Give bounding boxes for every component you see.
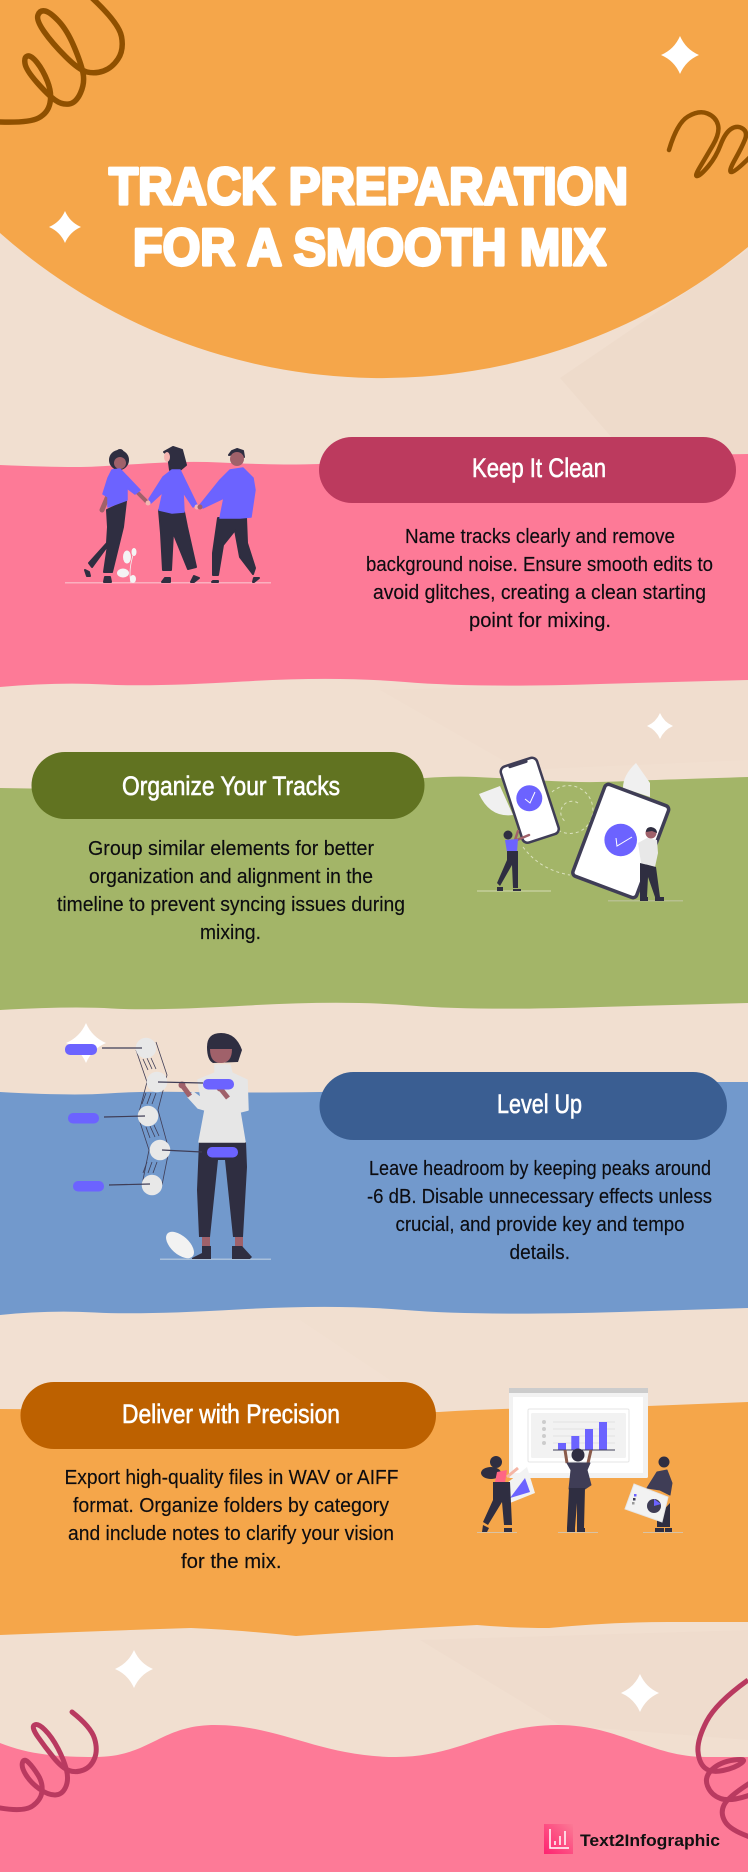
heading pill xyxy=(32,752,424,819)
title: TRACK PREPARATION xyxy=(109,158,628,216)
heading pill xyxy=(20,1382,436,1449)
body text xyxy=(366,526,713,632)
heading pill xyxy=(320,1072,727,1140)
star left of title xyxy=(49,211,81,243)
body text: point for mixing. xyxy=(469,610,611,632)
body text: format. Organize folders by category xyxy=(73,1495,389,1517)
title: FOR A SMOOTH MIX xyxy=(133,219,606,277)
squiggle top right xyxy=(669,112,748,176)
body text: for the mix. xyxy=(181,1551,282,1573)
heading: Deliver with Precision xyxy=(122,1399,340,1429)
star right xyxy=(621,1674,659,1712)
pink wave xyxy=(0,1725,748,1872)
body text xyxy=(64,1467,398,1573)
body text: Group similar elements for better xyxy=(88,838,374,860)
illustration: team with bar chart xyxy=(477,1388,683,1533)
panel: footer xyxy=(0,1650,748,1872)
body text xyxy=(57,838,405,944)
body text xyxy=(367,1158,712,1264)
body text: details. xyxy=(510,1242,570,1264)
body text: -6 dB. Disable unnecessary effects unless xyxy=(367,1186,712,1208)
squiggle bottom right xyxy=(698,1680,748,1837)
orange header shape xyxy=(0,0,748,378)
body text: organization and alignment in the xyxy=(89,866,373,888)
heading: Level Up xyxy=(497,1089,582,1119)
body text: and include notes to clarify your vision xyxy=(68,1523,394,1545)
panel: deliver with precision xyxy=(0,1382,748,1636)
heading: Keep It Clean xyxy=(472,453,606,483)
illustration: phone and tablet with people xyxy=(477,756,683,902)
logo text: Text2Infographic xyxy=(580,1831,720,1850)
body text: Leave headroom by keeping peaks around xyxy=(369,1158,711,1180)
panel: level up xyxy=(0,1023,748,1315)
heading: Organize Your Tracks xyxy=(122,771,340,801)
star xyxy=(647,713,673,739)
body text: timeline to prevent syncing issues during xyxy=(57,894,405,916)
squiggle top left xyxy=(0,0,122,122)
header panel xyxy=(0,0,748,378)
body text: Name tracks clearly and remove xyxy=(405,526,675,548)
body text: background noise. Ensure smooth edits to xyxy=(366,554,713,576)
title xyxy=(109,158,628,277)
logo mark xyxy=(544,1824,573,1854)
star xyxy=(66,1023,106,1063)
blue band xyxy=(0,1082,748,1315)
green band xyxy=(0,777,748,1010)
orange band xyxy=(0,1402,748,1636)
illustration: woman with skeleton diagram xyxy=(65,1033,271,1263)
squiggle bottom left xyxy=(0,1712,96,1810)
body text: crucial, and provide key and tempo xyxy=(396,1214,684,1236)
body text: avoid glitches, creating a clean starting xyxy=(373,582,706,604)
panel: organize your tracks xyxy=(0,713,748,1010)
body text: mixing. xyxy=(200,922,261,944)
panel: keep it clean xyxy=(0,437,748,687)
star left xyxy=(115,1650,153,1688)
body text: Export high-quality files in WAV or AIFF xyxy=(64,1467,398,1489)
heading pill xyxy=(319,437,736,503)
star top right xyxy=(661,36,699,74)
pink band xyxy=(0,454,748,687)
illustration: three people holding hands xyxy=(65,447,271,584)
